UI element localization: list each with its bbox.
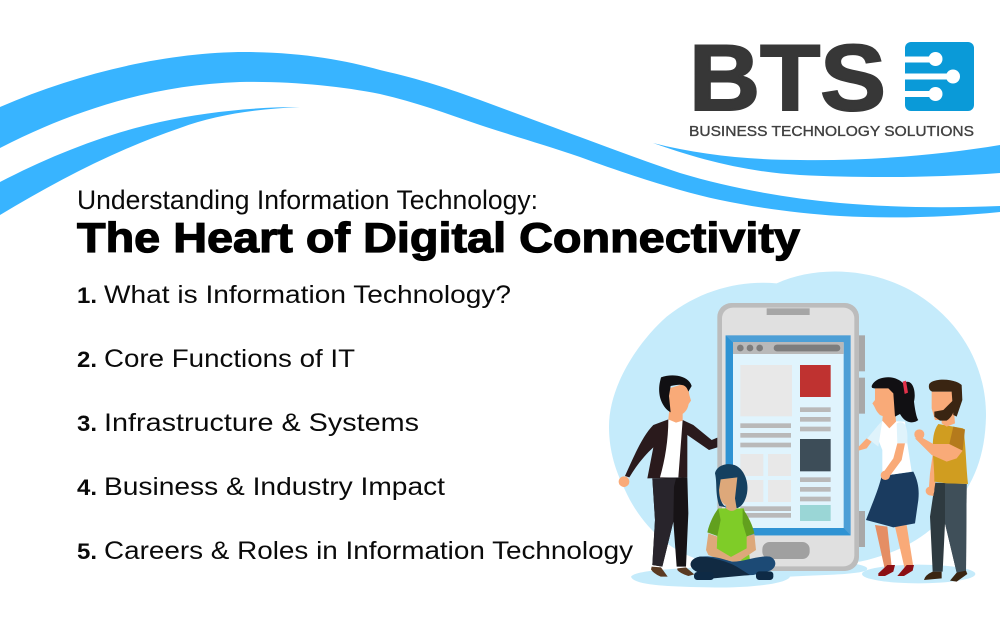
upper-right swoosh — [653, 143, 1000, 177]
person: seated woman in green — [691, 464, 775, 580]
person: man in dark jacket — [619, 375, 717, 577]
screen frame — [726, 335, 851, 535]
browser bar — [733, 342, 844, 354]
person: woman in white and navy skirt — [859, 377, 919, 576]
list of topics — [77, 281, 634, 565]
background blob — [609, 272, 986, 562]
item 3: Infrastructure & Systems — [104, 409, 419, 437]
item 1: What is Information Technology? — [104, 281, 511, 309]
phone body — [717, 303, 859, 571]
logo icon: circuit tile — [904, 42, 974, 111]
side buttons — [859, 335, 865, 547]
item 4: Business & Industry Impact — [104, 473, 445, 501]
item 2: Core Functions of IT — [104, 345, 355, 373]
logo tagline: BUSINESS TECHNOLOGY SOLUTIONS — [689, 123, 974, 140]
item 2: 2. — [77, 347, 97, 372]
home button — [762, 542, 810, 559]
item 1: 1. — [77, 283, 97, 308]
illustration: team around smartphone — [609, 272, 986, 588]
screen — [733, 343, 844, 528]
page content blocks — [740, 365, 831, 521]
item 4: 4. — [77, 475, 97, 500]
lower-left swoosh — [0, 107, 300, 215]
logo wordmark: BTS — [689, 25, 886, 130]
ground shadows — [631, 562, 975, 588]
smartphone — [717, 303, 865, 571]
item 5: 5. — [77, 539, 97, 564]
item 5: Careers & Roles in Information Technology — [104, 537, 634, 565]
subtitle: Understanding Information Technology: — [77, 185, 538, 215]
person: bearded man in mustard shirt — [914, 380, 968, 582]
top-left long wave swoosh — [0, 52, 1000, 217]
item 3: 3. — [77, 411, 97, 436]
main heading: The Heart of Digital Connectivity — [77, 214, 801, 261]
logo: BTS — [689, 25, 974, 140]
